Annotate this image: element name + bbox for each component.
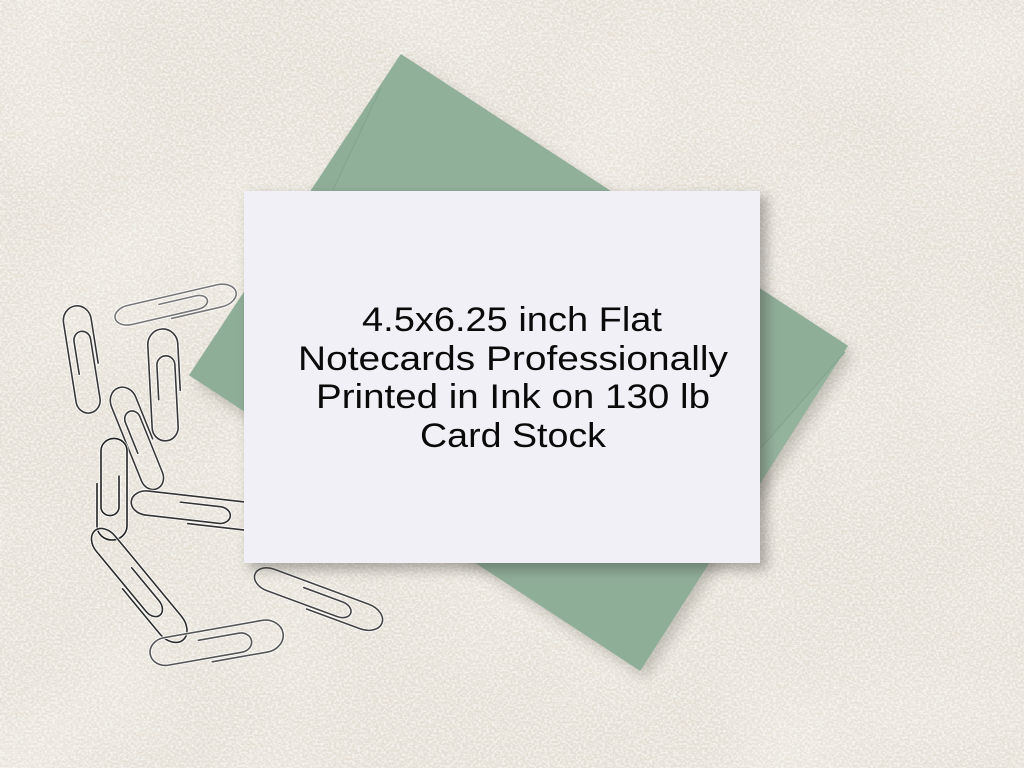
paperclip 4 [106, 383, 171, 493]
card caption: Notecards Professionally [298, 340, 728, 378]
card caption: Card Stock [420, 417, 607, 455]
paperclip 8 [148, 617, 286, 672]
paperclip 5 [97, 438, 127, 540]
paperclip 6 [130, 489, 264, 532]
card caption: Printed in Ink on 130 lb [316, 378, 710, 416]
card caption: 4.5x6.25 inch Flat [362, 301, 663, 339]
white notecard [244, 191, 767, 570]
paperclip 9 [250, 564, 387, 635]
paperclips [61, 281, 387, 672]
paperclip 2 [113, 281, 239, 331]
green envelope [190, 55, 853, 678]
paperclip 3 [147, 328, 183, 442]
card caption [298, 301, 728, 455]
paperclip 7 [83, 523, 194, 649]
paperclip 1 [61, 304, 106, 415]
